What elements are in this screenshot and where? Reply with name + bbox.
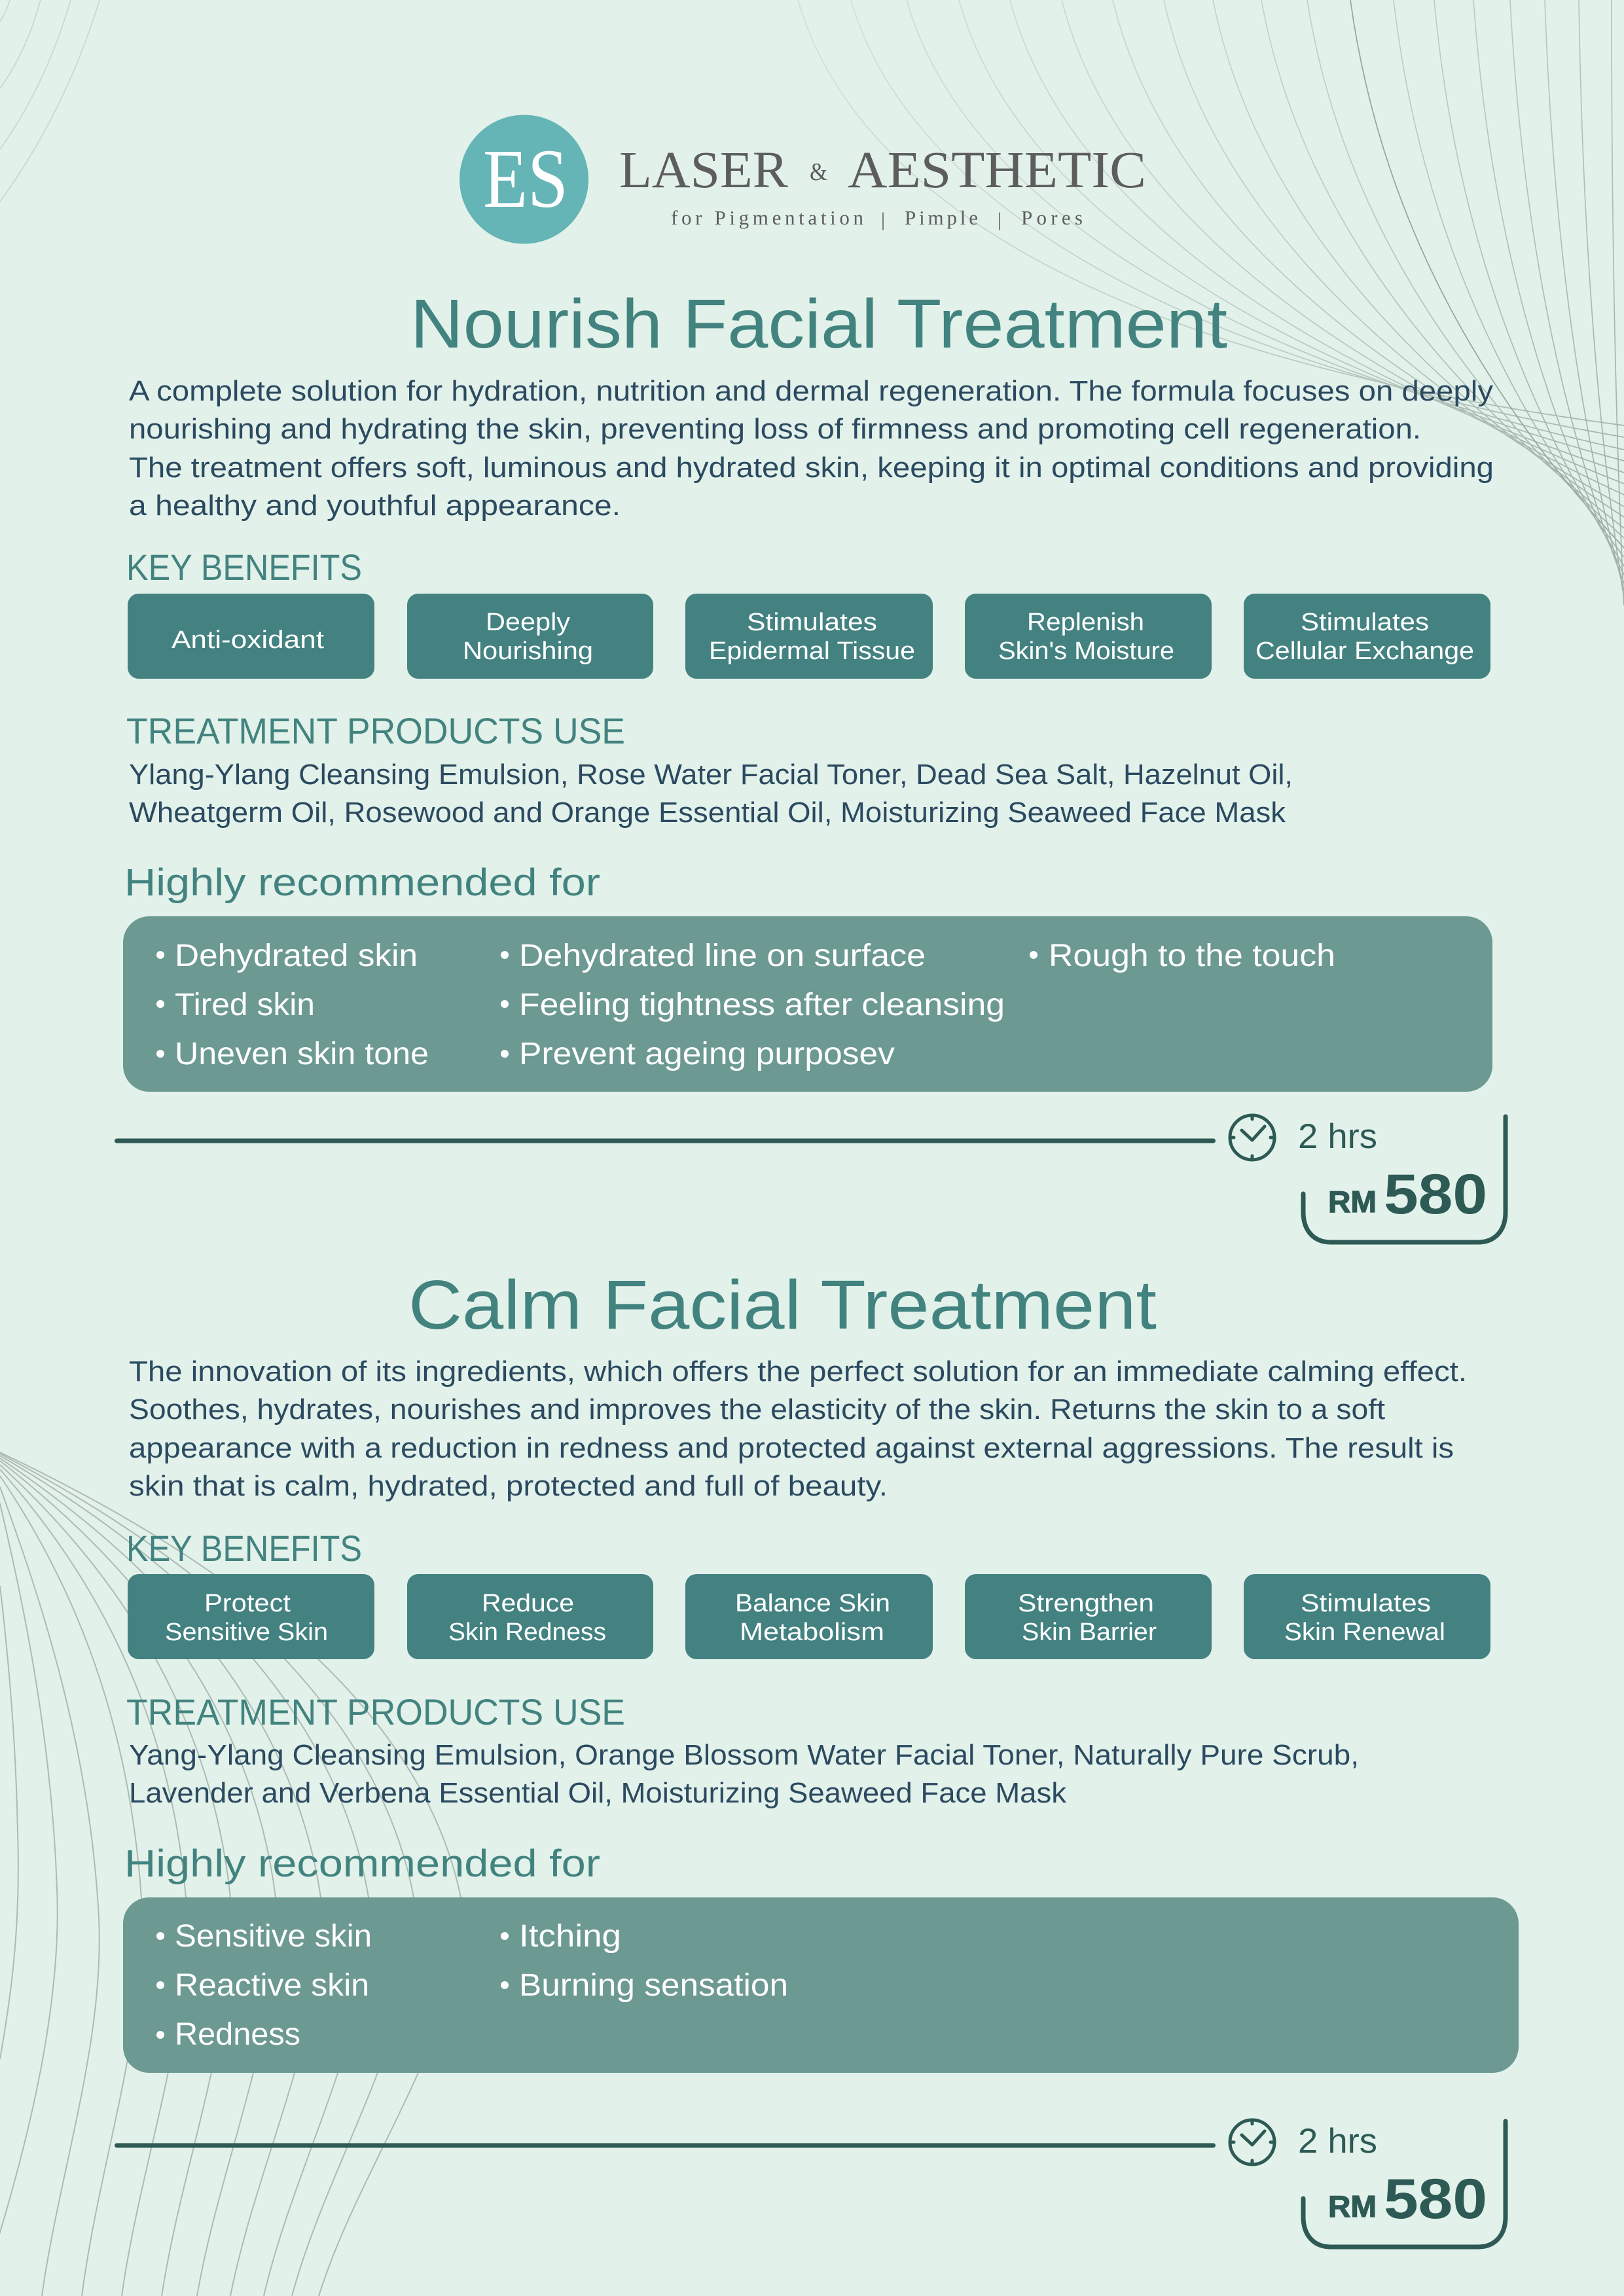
price: RM 580: RM	[1328, 2189, 1377, 2223]
panel: nourish recommendation list: Tired skin	[175, 988, 315, 1022]
chip: replenish skin's moisture: Skin's Moisture	[998, 637, 1174, 665]
chip: stimulates cellular exchange: Stimulates	[1301, 609, 1429, 636]
heading: key benefits: KEY BENEFITS	[126, 547, 362, 588]
text block: nourish description: The treatment offers soft, luminous and hydrated skin, keeping it in optimal conditions and providing	[129, 452, 1494, 484]
duration and price: nourish	[115, 1115, 1506, 1242]
chip: stimulates skin renewal: Skin Renewal	[1284, 1619, 1445, 1646]
logo	[460, 115, 1146, 243]
logo wordmark: &	[810, 158, 827, 186]
logo tagline	[671, 206, 1083, 230]
panel: calm recommendation list: Sensitive skin	[175, 1919, 372, 1954]
text block: calm products: Lavender and Verbena Essential Oil, Moisturizing Seaweed Face Mask	[129, 1777, 1067, 1809]
text block: calm description: skin that is calm, hydrated, protected and full of beauty.	[129, 1470, 888, 1502]
panel: nourish recommendation list: Uneven skin tone	[175, 1037, 429, 1071]
chip: reduce skin redness: Reduce	[482, 1590, 574, 1617]
panel: calm recommendation list: Redness	[175, 2017, 300, 2052]
chip: protect sensitive skin	[128, 1574, 374, 1659]
logo wordmark	[619, 142, 1146, 199]
chip: balance skin metabolism: Metabolism	[740, 1619, 884, 1646]
logo wordmark: AESTHETIC	[848, 142, 1146, 199]
chip: stimulates cellular exchange: Cellular Exchange	[1255, 637, 1474, 665]
chip: stimulates epidermal tissue: Stimulates	[747, 609, 877, 636]
heading: highly recommended for: Highly recommended for	[124, 861, 600, 904]
panel: nourish recommendation list: Dehydrated line on surface	[519, 939, 926, 973]
chip: balance skin metabolism	[685, 1574, 933, 1659]
logo tagline: |	[998, 209, 1001, 230]
panel: Calm Facial Treatment	[115, 1266, 1519, 2247]
logo badge	[460, 115, 588, 243]
chip: balance skin metabolism: Balance Skin	[735, 1590, 890, 1617]
panel: calm recommendation list: Reactive skin	[175, 1968, 369, 2003]
price: RM 580: RM	[1328, 1185, 1377, 1219]
heading: highly recommended for: Highly recommended for	[124, 1842, 600, 1885]
chip: strengthen skin barrier: Skin Barrier	[1022, 1619, 1157, 1646]
price: RM 580: 580	[1384, 1163, 1487, 1226]
chip: protect sensitive skin: Protect	[204, 1590, 291, 1617]
price bracket	[1303, 2121, 1506, 2247]
text block: nourish description: A complete solution for hydration, nutrition and dermal regeneration. The formula focuses on deeply	[129, 375, 1493, 407]
text block: nourish description: nourishing and hydrating the skin, preventing loss of firmness and promoting cell regeneration.	[129, 413, 1421, 445]
price: RM 580	[1328, 1163, 1487, 1226]
chip: replenish skin's moisture	[965, 594, 1212, 679]
panel: nourish recommendation list: Rough to the touch	[1049, 939, 1335, 973]
text block: nourish products: Ylang-Ylang Cleansing Emulsion, Rose Water Facial Toner, Dead Sea Salt, Hazelnut Oil,	[129, 759, 1293, 791]
chip: stimulates skin renewal: Stimulates	[1301, 1590, 1431, 1617]
text block: nourish products: Wheatgerm Oil, Rosewood and Orange Essential Oil, Moisturizing Seaweed Face Mask	[129, 797, 1286, 829]
panel: nourish recommendation list: Dehydrated skin	[175, 939, 418, 973]
logo tagline: for Pigmentation	[671, 206, 864, 229]
text block: calm description: appearance with a reduction in redness and protected against external aggressions. The result is	[129, 1432, 1454, 1464]
panel: calm recommendation list	[123, 1897, 1519, 2073]
logo tagline: |	[881, 209, 885, 230]
text block: calm description: The innovation of its ingredients, which offers the perfect solution for an immediate calming effect.	[129, 1355, 1467, 1388]
text block: calm description: Soothes, hydrates, nourishes and improves the elasticity of the skin. Returns the skin to a soft	[129, 1393, 1385, 1426]
chip: reduce skin redness: Skin Redness	[448, 1619, 606, 1646]
logo tagline: Pores	[1021, 206, 1083, 229]
logo badge: ES	[483, 132, 568, 225]
chip: stimulates epidermal tissue	[685, 594, 933, 679]
panel: nourish recommendation list: Prevent ageing purposev	[519, 1037, 895, 1071]
chip: stimulates skin renewal	[1244, 1574, 1490, 1659]
chip: deeply nourishing: Deeply	[486, 609, 570, 636]
panel: Nourish Facial Treatment	[115, 285, 1506, 1242]
price: RM 580: 580	[1384, 2168, 1487, 2231]
heading: key benefits: KEY BENEFITS	[126, 1528, 362, 1569]
heading: Calm Facial Treatment: Calm Facial Treatment	[408, 1266, 1157, 1344]
text block: nourish products	[129, 759, 1293, 829]
duration and price: calm	[115, 2120, 1506, 2247]
chip: stimulates epidermal tissue: Epidermal Tissue	[709, 637, 915, 665]
panel: nourish recommendation list: Feeling tightness after cleansing	[519, 988, 1005, 1022]
text block: nourish description	[129, 375, 1494, 522]
chip: anti-oxidant: Anti-oxidant	[171, 626, 325, 654]
price bracket	[1303, 1117, 1506, 1242]
panel: nourish recommendation list	[123, 916, 1492, 1092]
heading: treatment products use: TREATMENT PRODUCTS USE	[126, 1691, 625, 1732]
logo tagline: Pimple	[905, 206, 978, 229]
duration: 2 hrs: 2 hrs	[1298, 1117, 1377, 1156]
benefit chips	[128, 594, 1490, 679]
heading: Nourish Facial Treatment: Nourish Facial Treatment	[410, 285, 1227, 363]
price: RM 580	[1328, 2168, 1487, 2231]
chip: reduce skin redness	[407, 1574, 653, 1659]
chip: deeply nourishing	[407, 594, 653, 679]
duration: 2 hrs: 2 hrs	[1298, 2122, 1377, 2161]
chip: replenish skin's moisture: Replenish	[1027, 609, 1144, 636]
logo wordmark: LASER	[619, 142, 788, 199]
chip: stimulates cellular exchange	[1244, 594, 1490, 679]
panel: calm recommendation list: Itching	[519, 1919, 621, 1954]
heading: treatment products use: TREATMENT PRODUCTS USE	[126, 710, 625, 751]
chip: protect sensitive skin: Sensitive Skin	[165, 1619, 328, 1646]
benefit chips	[128, 1574, 1490, 1659]
text block: calm products	[129, 1739, 1359, 1809]
chip: deeply nourishing: Nourishing	[463, 637, 593, 665]
chip: strengthen skin barrier: Strengthen	[1018, 1590, 1154, 1617]
text block: nourish description: a healthy and youthful appearance.	[129, 490, 621, 522]
panel: calm recommendation list: Burning sensation	[519, 1968, 788, 2003]
text block: calm products: Yang-Ylang Cleansing Emulsion, Orange Blossom Water Facial Toner, Naturally Pure Scrub,	[129, 1739, 1359, 1771]
chip: anti-oxidant	[128, 594, 374, 679]
icon: clock	[1230, 1115, 1274, 1160]
chip: strengthen skin barrier	[965, 1574, 1212, 1659]
text block: calm description	[129, 1355, 1467, 1502]
icon: clock	[1230, 2120, 1274, 2164]
